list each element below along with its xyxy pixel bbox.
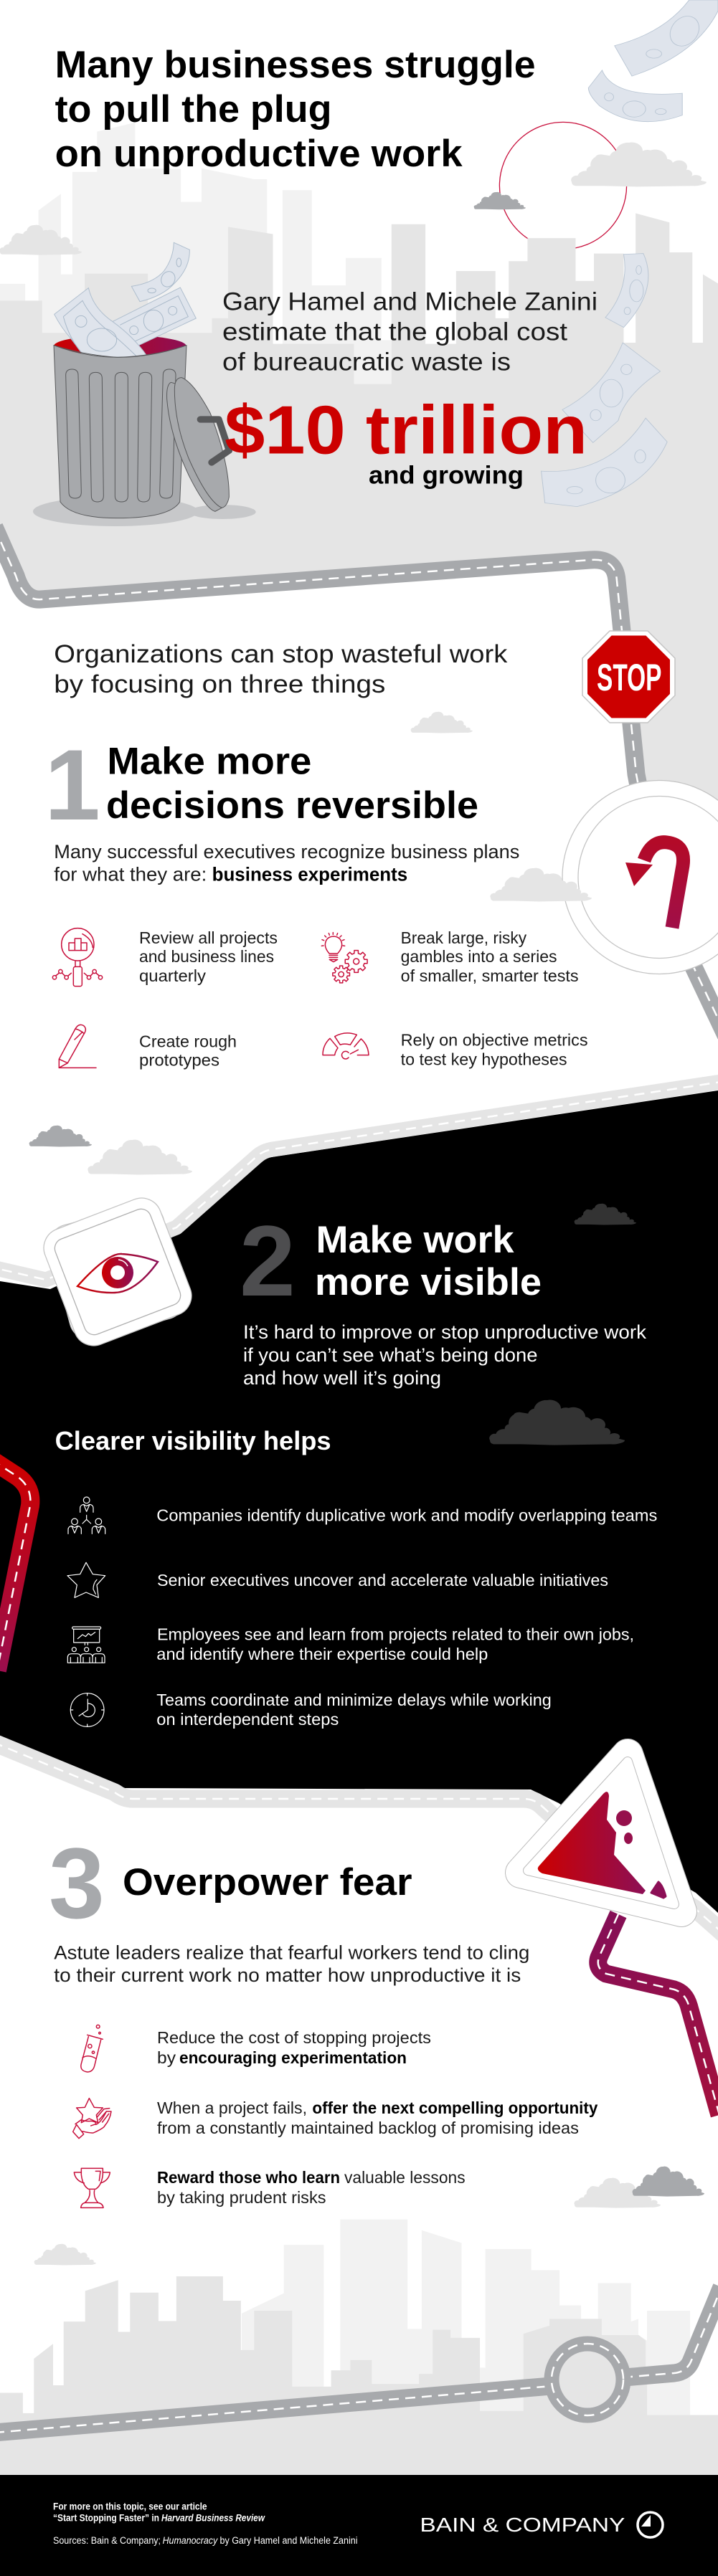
text: teams coordinate: Teams coordinate and minimize delays while working (156, 1691, 552, 1709)
icon: presentation (67, 1627, 105, 1663)
text: estimate intro: estimate that the global cost (222, 317, 567, 346)
text: break large gambles: of smaller, smarter tests (401, 966, 579, 985)
text: hard to improve: and how well it’s going (243, 1367, 441, 1389)
text: hard to improve: It’s hard to improve or stop unproductive work (243, 1321, 647, 1343)
heading: make work more visible (315, 1219, 542, 1303)
heading: make more decisions reversible: decisions reversible (106, 784, 478, 827)
grey road with roundabout (0, 2287, 718, 2433)
numeral 3: 3 (49, 1827, 105, 1939)
text: business experiments (54, 841, 519, 885)
text: create rough prototypes (139, 1032, 237, 1070)
text: objective metrics (401, 1031, 588, 1069)
text: teams coordinate (156, 1691, 552, 1729)
light road: upper edge of black section (0, 1081, 718, 1280)
text: create rough prototypes: prototypes (139, 1051, 219, 1070)
heading: clearer visibility helps: Clearer visibility helps (55, 1426, 331, 1455)
text: and growing: and growing (369, 462, 524, 489)
red road on black (0, 1460, 30, 1670)
icon: stop sign (582, 631, 675, 723)
text: hard to improve: if you can’t see what’s being done (243, 1344, 538, 1366)
top city skyline (0, 123, 718, 804)
icon: stop sign: STOP (597, 657, 661, 699)
black section background (0, 1090, 718, 1913)
heading: make work more visible: Make work (316, 1219, 514, 1261)
text: senior executives: Senior executives uncover and accelerate valuable initiatives (157, 1571, 608, 1589)
footer: article note: “Start Stopping Faster” in (53, 2512, 159, 2523)
title: to pull the plug (55, 88, 332, 130)
text: astute leaders: to their current work no matter how unproductive it is (54, 1964, 521, 1986)
bottom city skyline (0, 2220, 718, 2475)
text: break large gambles: Break large, risky (401, 928, 527, 947)
heading: make work more visible: more visible (315, 1261, 542, 1303)
heading: make more decisions reversible (106, 741, 478, 827)
clouds: middle (29, 1126, 636, 1445)
icon: org hierarchy (68, 1497, 105, 1534)
text: reward those who learn: valuable lessons (344, 2168, 466, 2187)
heading: make more decisions reversible: Make more (107, 741, 311, 783)
text: companies identify: Companies identify duplicative work and modify overlapping teams (156, 1506, 657, 1525)
icon: star in hands (73, 2099, 111, 2139)
text: break large gambles: gambles into a series (401, 947, 557, 966)
clouds: top (0, 143, 707, 733)
text: hard to improve (243, 1321, 647, 1389)
white area beneath first road (0, 534, 718, 1183)
intro: three things (54, 640, 508, 698)
icon: magnifier with chart (52, 928, 103, 987)
money bills falling (542, 0, 718, 507)
cloud: in front of u-turn sign (490, 868, 592, 901)
footer: sources (53, 2535, 357, 2546)
clouds: bottom (34, 2167, 704, 2265)
text: when a project fails: When a project fails, (157, 2099, 307, 2117)
intro: three things: by focusing on three things (54, 670, 385, 698)
title: on unproductive work (55, 133, 463, 175)
icon: pencil (59, 1025, 96, 1068)
text: review all projects: Review all projects (139, 928, 278, 947)
icon: trophy (74, 2168, 110, 2207)
logo: Bain & Company (420, 2512, 663, 2537)
icon: clock (70, 1693, 104, 1726)
text: when a project fails (157, 2099, 598, 2137)
text: astute leaders: Astute leaders realize that fearful workers tend to cling (54, 1942, 529, 1964)
footer: sources: Sources: Bain & Company; (53, 2535, 161, 2546)
text: reduce the cost: Reduce the cost of stopping projects (157, 2028, 431, 2047)
footer (0, 2475, 718, 2576)
text: review all projects (139, 928, 278, 985)
numeral 1: 1 (44, 728, 100, 841)
icon: rockslide warning sign (521, 1754, 681, 1911)
icon: test tube (81, 2025, 103, 2072)
text: employees see: Employees see and learn from projects related to their own jobs, (157, 1625, 634, 1643)
text: when a project fails: from a constantly maintained backlog of promising ideas (157, 2119, 579, 2137)
trash can with lid and money (33, 242, 256, 526)
maroon road (598, 1914, 718, 2115)
icon: u-turn sign (562, 780, 718, 974)
numeral 2: 2 (240, 1204, 296, 1317)
text: employees see: and identify where their expertise could help (156, 1645, 488, 1663)
title: Many businesses struggle (55, 44, 536, 86)
icon: light bulb and gears (321, 933, 367, 983)
text: business experiments: business experiments (212, 864, 407, 885)
footer: sources: Humanocracy (163, 2535, 218, 2546)
text: reduce the cost (157, 2028, 431, 2067)
footer: article note (53, 2501, 265, 2523)
text: review all projects: and business lines (139, 947, 274, 966)
big number: $10 trillion: $10 trillion (225, 392, 587, 469)
icon: gauge (323, 1033, 369, 1059)
text: reduce the cost: by (157, 2048, 176, 2067)
text: estimate intro: Gary Hamel and Michele Zanini (222, 287, 597, 316)
text: reduce the cost: encouraging experimentation (179, 2048, 407, 2067)
text: create rough prototypes: Create rough (139, 1032, 237, 1051)
text: objective metrics: Rely on objective metrics (401, 1031, 588, 1050)
heading: overpower fear: Overpower fear (123, 1861, 412, 1904)
light road: lower edge of black section (0, 1742, 718, 1936)
decorative red circle behind skyline (499, 122, 627, 249)
intro: three things: Organizations can stop wasteful work (54, 640, 508, 668)
text: estimate intro (222, 287, 597, 376)
title (55, 44, 536, 175)
text: business experiments: for what they are: (54, 864, 207, 885)
text: review all projects: quarterly (139, 966, 207, 985)
footer: sources: by Gary Hamel and Michele Zanini (219, 2535, 357, 2546)
text: teams coordinate: on interdependent steps (156, 1710, 339, 1729)
text: break large gambles (401, 928, 579, 985)
logo: Bain & Company: BAIN & COMPANY (420, 2514, 625, 2536)
text: reward those who learn: by taking prudent risks (157, 2188, 326, 2207)
text: reward those who learn: Reward those who learn (157, 2168, 340, 2187)
text: reward those who learn (157, 2168, 466, 2207)
icon: eye sign (38, 1192, 197, 1351)
text: when a project fails: offer the next compelling opportunity (312, 2099, 598, 2117)
text: estimate intro: of bureaucratic waste is (222, 347, 511, 376)
grey road: top winding (0, 527, 718, 1035)
footer: article note: Harvard Business Review (161, 2512, 265, 2523)
text: employees see (156, 1625, 634, 1663)
footer: article note: For more on this topic, see our article (53, 2501, 207, 2512)
text: objective metrics: to test key hypotheses (401, 1050, 567, 1069)
text: business experiments: Many successful executives recognize business plans (54, 841, 519, 862)
text: astute leaders (54, 1942, 529, 1986)
icon: star (67, 1562, 105, 1597)
